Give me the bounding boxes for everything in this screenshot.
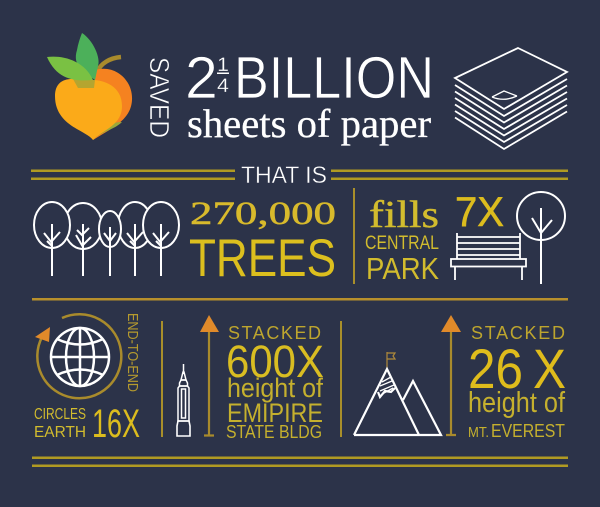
icon: globe with orbit	[35, 314, 121, 398]
text: height of: height of	[468, 387, 566, 419]
arrow: empire height	[200, 315, 219, 436]
label: saved: SAVED	[144, 57, 175, 138]
heading: 2 1/4 billion: BILLION	[234, 45, 434, 111]
text: stacked: STACKED	[228, 323, 321, 343]
text: state bldg: STATE BLDG	[226, 422, 322, 442]
divider	[353, 188, 355, 284]
text: circles earth: CIRCLES	[34, 406, 86, 423]
heading: that is: THAT IS	[241, 162, 327, 189]
text: mt everest: EVEREST	[491, 421, 565, 441]
lines: top double rule	[31, 170, 568, 180]
text: height of: height of	[227, 373, 323, 403]
heading: sheets of paper: sheets of paper	[187, 101, 431, 146]
text: stacked: STACKED	[471, 323, 565, 343]
text: central: CENTRAL	[365, 233, 439, 254]
stat: 16x: 16X	[92, 402, 140, 446]
divider	[340, 321, 342, 437]
stat: 26 x: 26	[468, 337, 523, 400]
stat: 600x: 600X	[226, 336, 324, 387]
heading: 2 1/4 billion: 4	[217, 76, 229, 97]
icon: park tree	[517, 192, 565, 284]
icon: trees	[34, 202, 179, 276]
text: empire: EMIPIRE	[227, 398, 323, 428]
stat: 7x: 7X	[455, 188, 504, 235]
stat: trees: TREES	[189, 229, 336, 288]
stat: 270,000: 270,000	[190, 196, 336, 232]
text: mt everest: MT.	[468, 424, 489, 441]
stat: 26 x	[468, 337, 566, 400]
text: fills: fills	[369, 194, 439, 236]
divider	[161, 321, 163, 437]
icon: empire state building	[177, 364, 190, 436]
text: end-to-end: END-TO-END	[124, 313, 141, 392]
arrow: everest height	[441, 315, 461, 435]
icon: paper stack	[455, 48, 567, 149]
icon: mountains	[354, 352, 441, 435]
heading: 2 1/4 billion: 2	[185, 45, 218, 111]
text: circles earth	[34, 406, 86, 441]
text: mt everest	[468, 421, 565, 441]
stat: 26 x: X	[533, 337, 566, 400]
text: circles earth: EARTH	[34, 424, 86, 441]
icon: bench	[451, 233, 526, 280]
lines: bottom double rule	[32, 456, 568, 467]
heading: 2 1/4 billion: 1	[217, 55, 229, 76]
text: park: PARK	[366, 251, 439, 286]
icon: peach	[47, 33, 132, 140]
rule: middle	[32, 298, 568, 300]
